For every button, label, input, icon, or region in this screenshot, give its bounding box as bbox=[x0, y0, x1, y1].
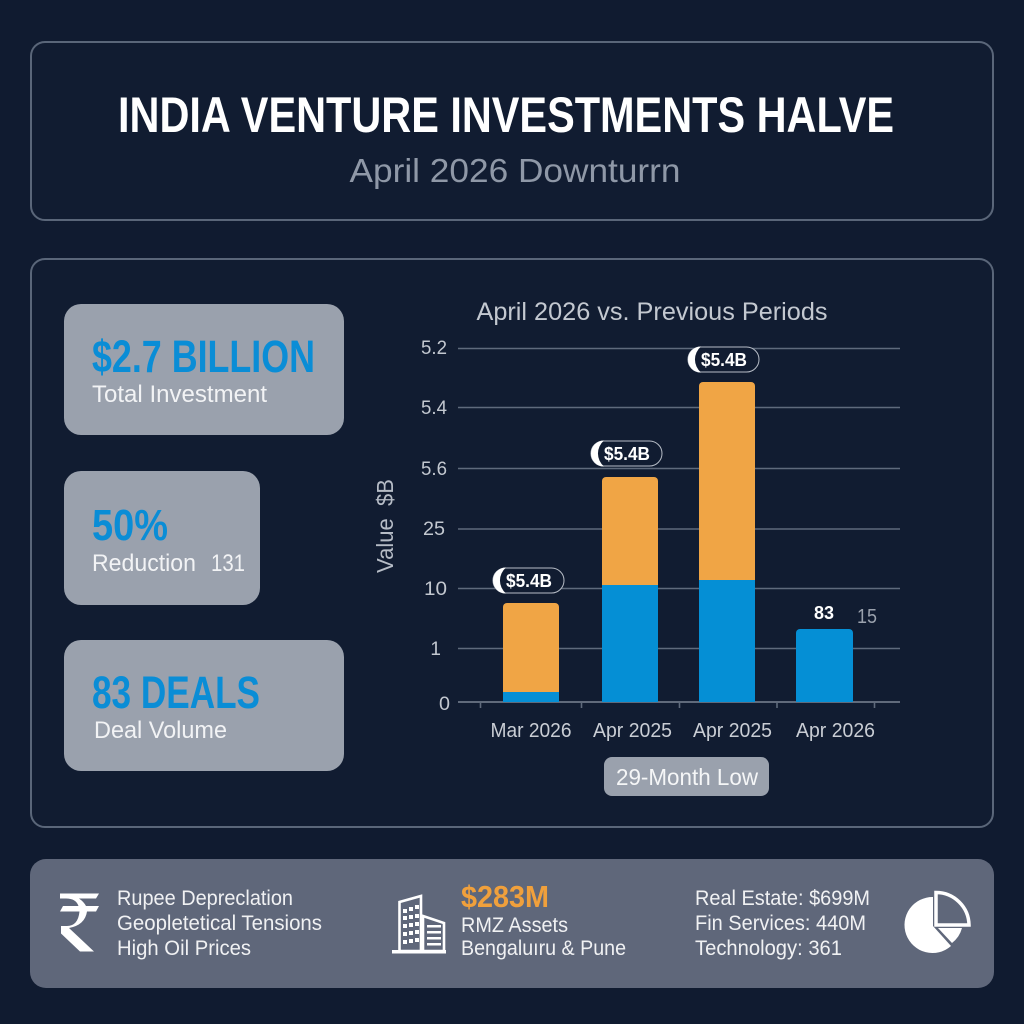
value label: 83: 83 bbox=[814, 603, 834, 623]
y axis labels: 0 bbox=[439, 694, 450, 715]
panel: bottom factors strip bbox=[30, 859, 994, 988]
y axis labels bbox=[421, 338, 450, 715]
icon: rupee bbox=[60, 894, 99, 952]
y axis title: Value $B bbox=[372, 479, 398, 573]
text block: causes: High Oil Prices bbox=[117, 937, 251, 960]
value label: 15: 15 bbox=[857, 606, 877, 628]
text block: sector breakdown bbox=[695, 887, 870, 960]
text block: causes: Rupee Depreclation bbox=[117, 887, 293, 910]
chart title: April 2026 vs. Previous Periods bbox=[476, 298, 828, 326]
bar chart bbox=[372, 298, 900, 796]
stat label: Reduction bbox=[92, 550, 196, 577]
y axis labels: 5.6 bbox=[421, 459, 447, 480]
bar: Apr 2026 bbox=[796, 629, 853, 702]
y axis labels: 1 bbox=[430, 639, 441, 660]
x axis labels: Apr 2026 bbox=[796, 720, 875, 742]
icon: office building bbox=[392, 896, 446, 954]
text block: sector breakdown: Real Estate: $699M bbox=[695, 887, 870, 910]
value pill: Mar 2026 bbox=[493, 568, 564, 594]
stat value: $2.7 BILLION bbox=[92, 331, 315, 382]
value pill: Apr 2025 second bbox=[688, 346, 759, 372]
bar: Apr 2025 second bbox=[699, 382, 755, 702]
stat label: Deal Volume bbox=[94, 717, 227, 744]
x axis labels: Apr 2025 bbox=[593, 720, 672, 742]
text block: RMZ assets: $283M bbox=[461, 879, 549, 914]
value pill: Apr 2025 second: $5.4B bbox=[701, 350, 747, 370]
y axis labels: 10 bbox=[424, 579, 447, 600]
text block: RMZ assets: Bengaluıru & Pune bbox=[461, 937, 626, 960]
text block: causes: Geopletetical Tensions bbox=[117, 912, 322, 935]
bar: Apr 2025 first bbox=[602, 477, 658, 702]
stat value: 50% bbox=[92, 501, 168, 550]
stat extra number: 131 bbox=[211, 550, 245, 577]
icon: pie chart bbox=[904, 892, 969, 953]
stat value: 83 DEALS bbox=[92, 667, 260, 718]
text block: causes bbox=[117, 887, 322, 960]
value pill: Apr 2025 first: $5.4B bbox=[604, 444, 650, 464]
x axis labels bbox=[490, 720, 875, 742]
stat card: deals bbox=[64, 640, 344, 771]
text block: RMZ assets bbox=[461, 879, 626, 960]
stat card: total investment bbox=[64, 304, 344, 435]
text block: RMZ assets: RMZ Assets bbox=[461, 914, 568, 937]
x axis labels: Mar 2026 bbox=[490, 720, 572, 742]
value pill: Apr 2025 first bbox=[591, 440, 662, 466]
y axis labels: 5.4 bbox=[421, 398, 447, 419]
badge: 29-month low: 29-Month Low bbox=[616, 764, 758, 790]
stat label: Total Investment bbox=[92, 381, 267, 408]
stat card: reduction bbox=[64, 471, 260, 605]
panel: title header bbox=[31, 42, 993, 220]
bar: Mar 2026 bbox=[503, 603, 559, 702]
panel: main content bbox=[31, 259, 993, 827]
subtitle: April 2026 Downturrn bbox=[350, 152, 680, 189]
y axis labels: 25 bbox=[423, 519, 445, 540]
badge: 29-month low bbox=[604, 757, 769, 796]
x axis labels: Apr 2025 bbox=[693, 720, 772, 742]
value pill: Mar 2026: $5.4B bbox=[506, 571, 552, 591]
text block: sector breakdown: Fin Services: 440M bbox=[695, 912, 866, 935]
text block: sector breakdown: Technology: 361 bbox=[695, 937, 842, 960]
y axis labels: 5.2 bbox=[421, 338, 447, 359]
